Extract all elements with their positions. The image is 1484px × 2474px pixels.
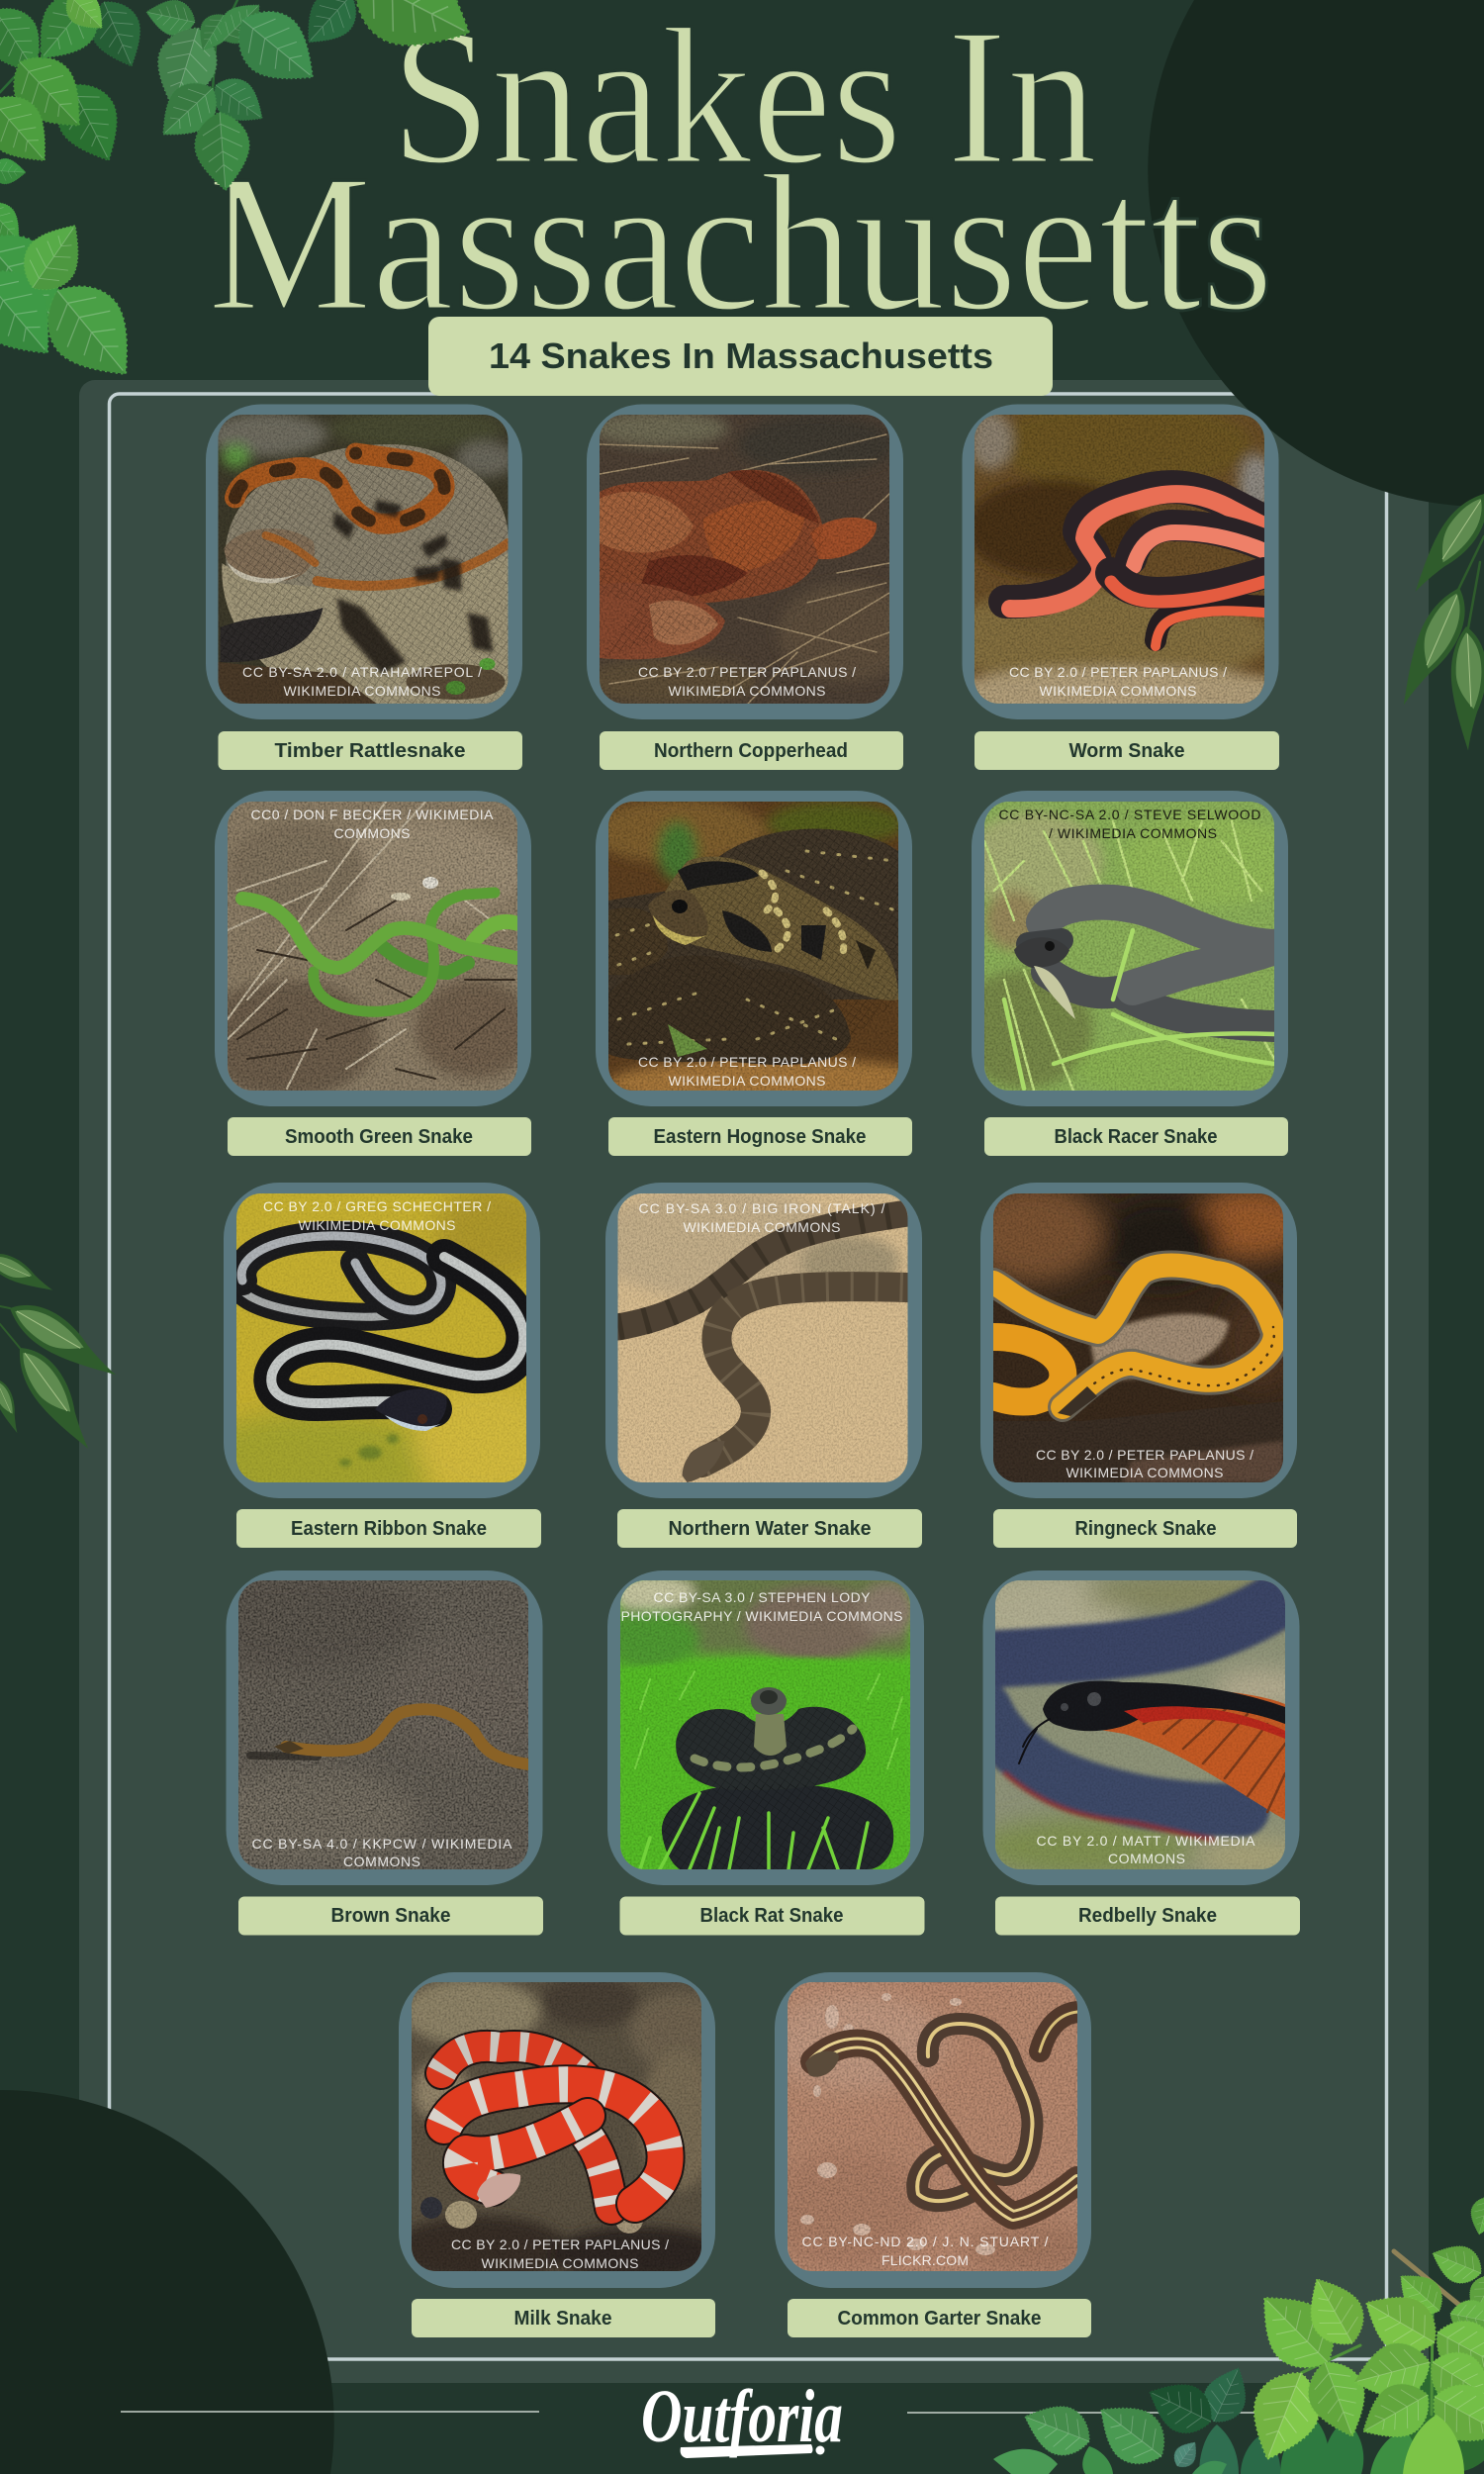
photo: worm snake [974, 415, 1264, 704]
name label [608, 1117, 912, 1156]
name label: Eastern Hognose Snake [653, 1126, 867, 1148]
title: Massachusetts [208, 135, 1273, 351]
name label [619, 1896, 924, 1936]
name label: Black Racer Snake [1055, 1126, 1217, 1148]
name label: Northern Water Snake [669, 1518, 871, 1540]
credit: CC BY 2.0 / GREG SCHECHTER / [263, 1198, 491, 1214]
subtitle badge [428, 317, 1053, 396]
name label [995, 1896, 1300, 1936]
name label: Smooth Green Snake [285, 1126, 473, 1148]
name label: Black Rat Snake [700, 1905, 843, 1927]
white frame [109, 394, 1387, 2359]
name label [236, 1509, 541, 1548]
photo: common garter snake [768, 1982, 1104, 2275]
card: Brown Snake [226, 1570, 543, 1936]
subtitle badge: 14 Snakes In Massachusetts [489, 335, 993, 376]
name label [788, 2299, 1091, 2337]
logo: Outforia: Outforia [641, 2375, 843, 2458]
card: Black Rat Snake [601, 1570, 924, 1936]
credit: CC BY 2.0 / PETER PAPLANUS / [451, 2236, 669, 2252]
decorative circle: bottom left [0, 2090, 334, 2474]
credit: COMMONS [343, 1854, 420, 1869]
decorative circle: top right [1148, 0, 1484, 507]
photo: smooth green snake [228, 802, 517, 1091]
name label: Redbelly Snake [1078, 1905, 1217, 1927]
credit: WIKIMEDIA COMMONS [669, 683, 825, 699]
card: Smooth Green Snake [198, 791, 534, 1156]
credit: CC BY 2.0 / MATT / WIKIMEDIA [1037, 1833, 1255, 1849]
credit: CC BY 2.0 / PETER PAPLANUS / [1036, 1447, 1253, 1463]
card: Eastern Ribbon Snake [224, 1183, 541, 1548]
credit [999, 807, 1260, 841]
credit: CC BY 2.0 / PETER PAPLANUS / [1009, 664, 1227, 680]
credit: CC BY-SA 2.0 / ATRAHAMREPOL / [242, 664, 482, 680]
name label: Worm Snake [1068, 740, 1185, 762]
credit: CC0 / DON F BECKER / WIKIMEDIA [251, 807, 494, 822]
credit [451, 2236, 669, 2271]
credit: CC BY-SA 3.0 / STEPHEN LODY [653, 1589, 871, 1605]
content panel [79, 380, 1429, 2383]
photo: northern water snake [617, 1193, 908, 1482]
credit [638, 664, 856, 699]
credit: CC BY 2.0 / PETER PAPLANUS / [638, 664, 856, 680]
credit: WIKIMEDIA COMMONS [283, 683, 441, 699]
card: Eastern Hognose Snake [596, 791, 912, 1156]
credit: / WIKIMEDIA COMMONS [1049, 825, 1217, 841]
photo: ringneck snake [993, 1193, 1283, 1482]
credit: FLICKR.COM [881, 2252, 969, 2268]
card: Common Garter Snake [768, 1972, 1104, 2337]
credit [621, 1589, 902, 1624]
name label: Ringneck Snake [1074, 1518, 1217, 1540]
card: Milk Snake [392, 1972, 728, 2337]
photo: eastern hognose snake [608, 802, 898, 1091]
credit: CC BY-NC-ND 2.0 / J. N. STUART / [801, 2234, 1049, 2249]
name label [600, 731, 903, 770]
name label: Common Garter Snake [837, 2308, 1041, 2330]
name label [412, 2299, 715, 2337]
foliage: right eucalyptus sprig [1389, 485, 1484, 751]
credit: PHOTOGRAPHY / WIKIMEDIA COMMONS [621, 1608, 902, 1624]
credit [801, 2234, 1049, 2268]
credit [639, 1200, 885, 1235]
foliage: mid left top cluster [0, 157, 154, 398]
card: Ringneck Snake [964, 1183, 1310, 1548]
name label: Milk Snake [514, 2308, 611, 2330]
name label: Timber Rattlesnake [275, 740, 465, 762]
credit: WIKIMEDIA COMMONS [669, 1073, 825, 1089]
credit: WIKIMEDIA COMMONS [299, 1217, 455, 1233]
credit [251, 807, 494, 841]
name label: Northern Copperhead [654, 740, 848, 762]
credit [263, 1198, 491, 1233]
card: Northern Water Snake [588, 1183, 922, 1548]
card: Black Racer Snake [955, 791, 1301, 1156]
card: Timber Rattlesnake [206, 404, 522, 770]
photo: milk snake [412, 1982, 701, 2271]
credit: CC BY 2.0 / PETER PAPLANUS / [638, 1054, 856, 1070]
name label [974, 731, 1279, 770]
credit: WIKIMEDIA COMMONS [1039, 683, 1197, 699]
footer divider right [907, 2412, 1326, 2414]
photo: eastern ribbon snake [236, 1193, 526, 1482]
footer divider left [121, 2411, 539, 2413]
foliage: left eucalyptus sprig [0, 1246, 127, 1458]
credit [242, 664, 482, 699]
foliage: bottom right [993, 2193, 1484, 2474]
name label [238, 1896, 543, 1936]
name label [617, 1509, 922, 1548]
credit [1036, 1447, 1253, 1480]
name label [228, 1117, 531, 1156]
credit [638, 1054, 856, 1089]
card: Worm Snake [962, 404, 1279, 770]
name label: Brown Snake [330, 1905, 451, 1927]
credit [1009, 664, 1227, 699]
credit: COMMONS [1108, 1851, 1185, 1866]
credit: WIKIMEDIA COMMONS [683, 1219, 841, 1235]
credit: CC BY-SA 3.0 / BIG IRON (TALK) / [639, 1200, 885, 1216]
credit [1037, 1833, 1255, 1866]
credit: CC BY-NC-SA 2.0 / STEVE SELWOOD [999, 807, 1260, 822]
card: Redbelly Snake [983, 1570, 1300, 1936]
name label [993, 1509, 1297, 1548]
title [208, 0, 1273, 351]
foliage: top left [0, 0, 489, 293]
photo: black rat snake [620, 1580, 910, 1869]
photo: redbelly snake [995, 1580, 1285, 1869]
credit: COMMONS [334, 825, 410, 841]
credit [251, 1836, 512, 1869]
photo: brown snake [238, 1580, 528, 1869]
photo: timber rattlesnake [208, 409, 514, 704]
name label [984, 1117, 1288, 1156]
credit: WIKIMEDIA COMMONS [1067, 1465, 1223, 1480]
credit: CC BY-SA 4.0 / KKPCW / WIKIMEDIA [251, 1836, 512, 1852]
card: Northern Copperhead [580, 404, 916, 770]
credit: WIKIMEDIA COMMONS [481, 2255, 639, 2271]
photo: black racer snake [984, 802, 1274, 1091]
name label [218, 731, 522, 770]
name label: Eastern Ribbon Snake [291, 1518, 487, 1540]
photo: northern copperhead [600, 415, 889, 704]
